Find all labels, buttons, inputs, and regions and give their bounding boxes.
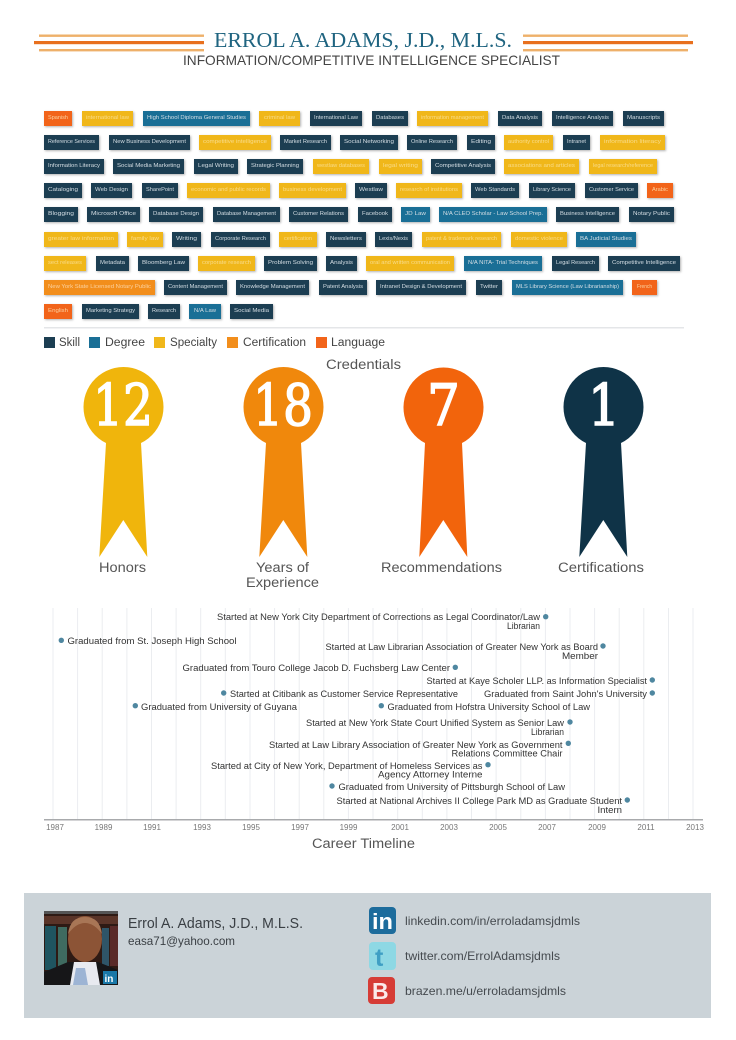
chip: High School Diploma: High School Diploma General Studies [147,115,247,121]
chip: certification: certification [284,236,312,242]
timeline year axis: 2013 [686,823,704,832]
legend: Certification: Certification [243,337,306,349]
chip: Social Networking [340,135,398,150]
event: Hofstra University: Graduated from Hofstra University School of Law [388,702,591,712]
chip: Intelligence Analysis: Intelligence Analysis [556,115,610,121]
chip: Social Networking: Social Networking [344,139,394,145]
chip: family law: family law [131,236,159,242]
chip: Cataloging: Cataloging [48,187,78,193]
chip: domestic violence [511,232,567,247]
timeline year axis: 2011 [637,823,655,832]
legend: Skill: Skill [59,337,80,349]
chip: Legal Research [552,256,599,271]
chip: N/A CLEO Scholar [439,207,547,222]
timeline year axis: 1987 [46,823,64,832]
chip: Microsoft Office: Microsoft Office [91,211,136,217]
event: Department of Homeless Services: Agency Attorney Interne [378,770,482,780]
chip: Twitter: Twitter [480,284,498,290]
chip: Notary Public [629,207,674,222]
chip: Competitive Analysis: Competitive Analysis [435,163,492,169]
chip: Lexis/Nexis: Lexis/Nexis [379,236,409,242]
chip: Blogging: Blogging [48,211,74,217]
timeline year axis: 2007 [538,823,556,832]
chip: Content Management [164,280,227,295]
chip: legal research/reference: legal research/reference [593,163,653,169]
chip: Knowledge Management: Knowledge Management [240,284,306,290]
chip: Database Design: Database Design [153,211,199,217]
chip: patent & trademark research: patent & trademark research [426,236,497,242]
chip: Facebook: Facebook [362,211,389,217]
chip: Legal Research: Legal Research [556,260,595,266]
chip: International Law: International Law [314,115,358,121]
chip: westlaw databases: westlaw databases [317,163,366,169]
chip: competitive intelligence: competitive intelligence [203,139,267,145]
chip: information management: information management [421,115,485,121]
profile photo [44,911,118,985]
chip: Competitive Intelligence [608,256,680,271]
icon: Brazen: B [372,978,389,1004]
chip: MLS Library Science [512,280,623,295]
event: Citibank: Started at Citibank as Customer Service Representative [230,689,458,699]
event: NYC Department of Corrections: Started at New York City Department of Corrections as Legal Coordinator/Law [217,612,541,622]
chip: family law [127,232,163,247]
chip: legal writing: legal writing [383,163,418,169]
chip: Library Science: Library Science [533,187,571,193]
chip: Twitter [476,280,502,295]
chip: N/A NITA [464,256,542,271]
chip: Strategic Planning: Strategic Planning [251,163,299,169]
event: National Archives II: Intern [598,805,622,815]
timeline year axis: 1997 [291,823,309,832]
chip: Content Management: Content Management [168,284,224,290]
chip: Manuscripts [623,111,664,126]
title: ERROL A. ADAMS, J.D., M.L.S. [214,28,512,52]
timeline year axis: 2003 [440,823,458,832]
icon: Twitter: t [375,944,384,972]
contact panel [24,893,711,1018]
ribbon: 7 Recommendations: Recommendations [381,560,502,575]
timeline caption: Career Timeline [312,836,415,851]
chip: Intranet Design & Development [376,280,466,295]
chip: Online Research: Online Research [411,139,453,145]
chip: Westlaw: Westlaw [359,187,383,193]
chip: High School Diploma [143,111,250,126]
chip: Problem Solving: Problem Solving [268,260,313,266]
chip: Writing [172,232,201,247]
chip: oral and written communication: oral and written communication [370,260,450,266]
LinkedIn url: linkedin.com/in/erroladamsjdmls [405,914,580,928]
event: Kaye Scholer: Started at Kaye Scholer LLP. as Information Specialist [426,676,647,686]
chip: Reference Services: Reference Services [48,139,96,145]
ribbon: 7 Recommendations [381,368,502,575]
chip: domestic violence: domestic violence [515,236,563,242]
chip: MLS Library Science: MLS Library Science (Law Librarianship) [516,284,619,290]
event: New York State Court: Librarian [531,727,564,737]
chip: New York State Licensed Notary Public [44,280,155,295]
left header stripes [34,34,204,51]
chip: Customer Relations: Customer Relations [293,211,345,217]
chip: information literacy: information literacy [604,139,662,145]
chip: Cataloging [44,183,82,198]
chip: Database Management [213,207,280,222]
chip: Web Design [91,183,132,198]
legend: Degree [89,337,145,349]
chip: Intranet [563,135,590,150]
chip: Social Media Marketing [113,159,184,174]
chip: oral and written communication [366,256,454,271]
chip: authority control: authority control [508,139,549,145]
chip: international law [82,111,133,126]
chip: Arabic [647,183,673,198]
chip: corporate research: corporate research [202,260,251,266]
chip: N/A CLEO Scholar: N/A CLEO Scholar - Law School Prep. [443,211,543,217]
tag cloud [44,111,680,319]
chip: Library Science [529,183,575,198]
timeline year axis: 1993 [193,823,211,832]
chip: Intranet Design & Development: Intranet Design & Development [380,284,463,290]
timeline year axis: 1995 [242,823,260,832]
chip: international law: international law [86,115,129,121]
chip: N/A Law: N/A Law [194,308,216,314]
chip: New York State Licensed Notary Public: New York State Licensed Notary Public [48,284,152,290]
event: Law Library Association: Relations Committee Chair [452,748,562,758]
event: Law Librarian Association: Member [562,651,598,661]
chip: Lexis/Nexis [375,232,412,247]
Twitter url: twitter.com/ErrolAdamsjdmls [405,949,560,963]
chip: Social Media: Social Media [234,308,269,314]
chip: associations and articles [504,159,579,174]
legend: Language: Language [331,337,385,349]
event: Department of Homeless Services: Started at City of New York, Department of Homeless Services as [211,761,483,771]
chip: Web Design: Web Design [95,187,128,193]
ribbon: 1 Certifications [558,367,644,575]
contact name: Errol A. Adams, J.D., M.L.S. [128,916,303,932]
chip: business development: business development [283,187,343,193]
chip: Arabic: Arabic [652,187,669,193]
event: Saint John's University: Graduated from Saint John's University [484,689,648,699]
chip: Facebook [358,207,392,222]
chip: Notary Public: Notary Public [633,211,671,217]
ribbon: 1 Certifications: Certifications [558,560,644,575]
chip: JD Law: JD Law [405,211,426,217]
chip: BA Judicial Studies [576,232,636,247]
timeline year axis [46,823,704,832]
chip: sect releases: sect releases [48,260,83,266]
subtitle: INFORMATION/COMPETITIVE INTELLIGENCE SPECIALIST [183,52,560,68]
profile photo: in [104,974,113,985]
chip: Competitive Analysis [431,159,495,174]
chip: Intelligence Analysis [552,111,613,126]
chip: N/A Law [189,304,221,319]
chip: SharePoint [142,183,178,198]
chip: Web Standards: Web Standards [475,187,516,193]
chip: Intranet: Intranet [567,139,587,145]
chip: New Business Development: New Business Development [113,139,187,145]
event: Department of Homeless Services [211,761,491,780]
chip: greater law information [44,232,118,247]
chip: research of institutions: research of institutions [400,187,459,193]
chip: SharePoint: SharePoint [146,187,175,193]
chip: Customer Service: Customer Service [589,187,634,193]
event: St. Joseph High School: Graduated from St. Joseph High School [68,636,236,646]
contact email: easa71@yahoo.com [128,934,235,948]
legend: Skill [44,337,80,349]
chip: Data Analysis: Data Analysis [502,115,539,121]
chip: economic and public records [187,183,270,198]
chip: legal writing [379,159,422,174]
chip: Reference Services [44,135,99,150]
chip: Problem Solving [264,256,317,271]
event: Touro College: Graduated from Touro College Jacob D. Fuchsberg Law Center [182,663,450,673]
ribbon: 12 Honors: Honors [99,560,146,575]
chip: Editing: Editing [471,139,491,145]
chip: Database Management: Database Management [217,211,277,217]
chip: Marketing Strategy: Marketing Strategy [86,308,136,314]
legend: Degree: Degree [105,337,145,349]
chip: Research: Research [152,308,176,314]
timeline year axis: 1991 [143,823,161,832]
icon: LinkedIn [369,907,396,934]
chip: Patent Analysis [319,280,367,295]
chip: Newsletters: Newsletters [330,236,363,242]
chip: English: English [48,308,68,314]
ribbon: 12 Honors [84,367,163,575]
chip: economic and public records: economic and public records [191,187,267,193]
chip: Information Literacy: Information Literacy [48,163,101,169]
event: National Archives II [336,796,630,815]
chip: Web Standards [471,183,519,198]
timeline year axis: 2009 [588,823,606,832]
timeline year axis: 2005 [489,823,507,832]
chip: Strategic Planning [247,159,303,174]
chip: Information Literacy [44,159,104,174]
event: Law Library Association: Started at Law Library Association of Greater New York as Government [269,740,563,750]
event: NYC Department of Corrections [217,612,548,631]
ribbon: 18 Years of Experience: Years of [256,560,309,575]
chip: French [632,280,657,295]
chip: Customer Service [585,183,638,198]
chip: Editing [467,135,495,150]
chip: Research [148,304,180,319]
legend [44,337,385,349]
chip: Knowledge Management [236,280,309,295]
right header stripes [523,34,693,51]
chip: certification [279,232,317,247]
chip: Online Research [407,135,457,150]
chip: Bloomberg Law: Bloomberg Law [142,260,185,266]
ribbon: 18 Years of Experience: 18 [253,373,313,439]
chip: patent & trademark research [422,232,501,247]
event: New York State Court [306,718,573,737]
icon: Twitter [369,942,396,972]
header [34,28,693,68]
chip: information literacy [600,135,665,150]
ribbon: 1 Certifications: 1 [588,373,620,439]
chip: Analysis: Analysis [330,260,354,266]
legend: Specialty: Specialty [170,337,217,349]
chip: Newsletters [326,232,366,247]
chip: Market Research [280,135,331,150]
chip: Database Design [149,207,203,222]
chip: Manuscripts: Manuscripts [627,115,661,121]
icon: Brazen [368,977,395,1004]
chip: Metadata: Metadata [100,260,125,266]
chip: BA Judicial Studies: BA Judicial Studies [580,236,633,242]
chip: Legal Writing: Legal Writing [198,163,234,169]
chip: Writing: Writing [176,236,197,242]
chip: Westlaw [355,183,387,198]
chip: criminal law: criminal law [264,115,295,121]
event: New York State Court: Started at New York State Court Unified System as Senior Law [306,718,565,728]
chip: greater law information: greater law information [48,236,114,242]
chip: English [44,304,72,319]
chip: Patent Analysis: Patent Analysis [323,284,364,290]
chip: N/A NITA: N/A NITA- Trial Techniques [468,260,539,266]
chip: research of institutions [396,183,462,198]
chip: JD Law [401,207,430,222]
chip: Databases: Databases [376,115,405,121]
chip: Business Intelligence [556,207,619,222]
chip: Customer Relations [289,207,348,222]
chip: Bloomberg Law [138,256,189,271]
chip: Data Analysis [498,111,542,126]
event: National Archives II: Started at National Archives II College Park MD as Graduate Student [336,796,623,806]
chip: Analysis [326,256,357,271]
chip: business development [279,183,346,198]
chip: New Business Development [109,135,190,150]
timeline year axis: 2001 [391,823,409,832]
chip: Market Research: Market Research [284,139,327,145]
chip: Marketing Strategy [82,304,139,319]
chip: corporate research [198,256,255,271]
career timeline chart [59,612,655,815]
chip: associations and articles: associations and articles [508,163,576,169]
chip: Corporate Research: Corporate Research [215,236,266,242]
chip: information management [417,111,488,126]
chip: Spanish [44,111,72,126]
chip: Microsoft Office [87,207,140,222]
event: NYC Department of Corrections: Librarian [507,621,540,631]
credentials heading: Credentials [326,357,401,372]
ribbon: 18 Years of Experience: Experience [246,575,319,590]
timeline year axis: 1989 [95,823,113,832]
chip: Metadata [96,256,129,271]
ribbon: 18 Years of Experience [244,367,324,590]
chip: Blogging [44,207,78,222]
chip: Spanish: Spanish [48,115,68,121]
chip: westlaw databases [313,159,369,174]
chip: legal research/reference [589,159,657,174]
chip: Databases [372,111,408,126]
chip: Legal Writing [194,159,238,174]
icon: LinkedIn: in [372,909,393,934]
chip: International Law [310,111,362,126]
event: Law Librarian Association [326,642,606,661]
chip: criminal law [259,111,300,126]
Brazen url: brazen.me/u/erroladamsjdmls [405,984,566,998]
chip: Social Media [230,304,273,319]
event: Law Librarian Association: Started at Law Librarian Association of Greater New York as Board [326,642,598,652]
chip: Competitive Intelligence: Competitive Intelligence [612,260,676,266]
chip: competitive intelligence [199,135,271,150]
chip: French: French [637,284,652,290]
chip: Business Intelligence: Business Intelligence [560,211,615,217]
event: University of Guyana: Graduated from University of Guyana [141,702,297,712]
ribbon: 12 Honors: 12 [93,373,153,439]
chip: Social Media Marketing: Social Media Marketing [117,163,180,169]
timeline year axis: 1999 [340,823,358,832]
ribbon: 7 Recommendations: 7 [427,373,460,439]
chip: sect releases [44,256,86,271]
event: University of Pittsburgh: Graduated from University of Pittsburgh School of Law [338,782,566,792]
chip: authority control [504,135,553,150]
event: Law Library Association [269,740,571,758]
chip: Corporate Research [211,232,270,247]
